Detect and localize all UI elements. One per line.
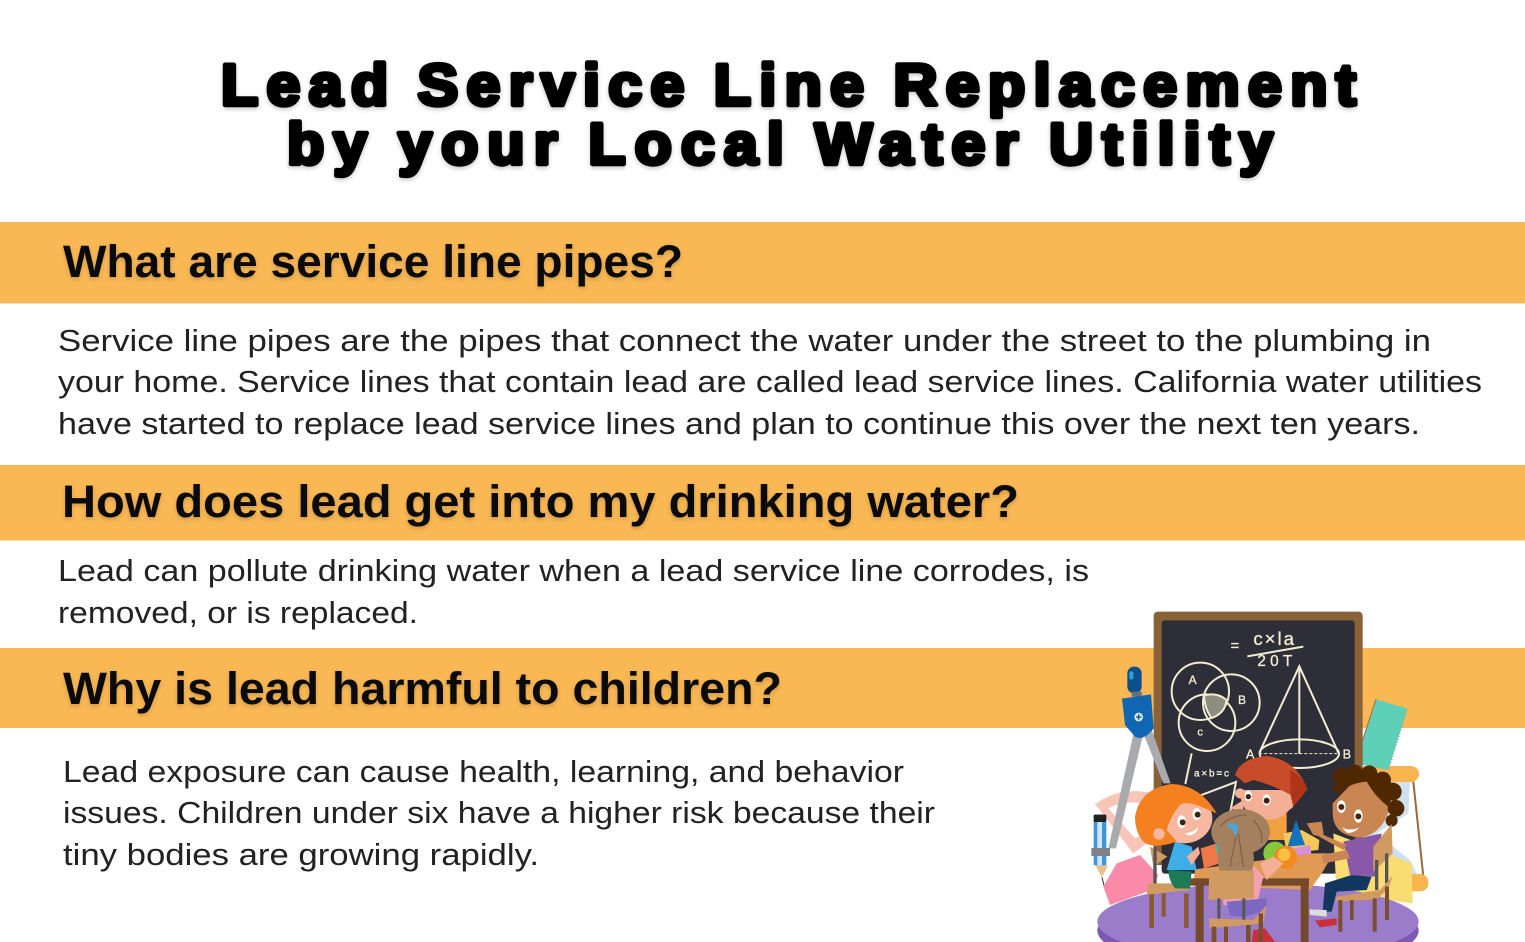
panel: what are service line pipes (0, 222, 1525, 441)
text block: how lead pollutes water (58, 553, 1089, 630)
icon: hourglass (1328, 766, 1428, 891)
text block: effects of lead exposure (63, 754, 935, 872)
text block: service line explanation: have started to replace lead service lines and plan to continue this over the next ten years. (58, 406, 1420, 441)
heading band: how does lead get into my drinking water: How does lead get into my drinking water? (62, 476, 1019, 527)
text block: effects of lead exposure: Lead exposure can cause health, learning, and behavior (63, 754, 904, 789)
text block: service line explanation (58, 323, 1482, 441)
chair: right (1336, 824, 1393, 932)
title: by your Local Water Utility (287, 111, 1273, 177)
heading band: why is lead harmful to children: Why is lead harmful to children? (63, 663, 782, 714)
icon: drawing compass (1091, 667, 1171, 885)
heading band: why is lead harmful to children (0, 648, 1525, 728)
title: Lead Service Line Replacement (221, 52, 1356, 118)
child: girl with ponytail, seen from behind (1211, 809, 1283, 942)
illustration: children at a desk in front of a chalkboard (1091, 612, 1428, 942)
heading band: what are service line pipes (0, 222, 1525, 304)
panel: why is lead harmful to children (0, 648, 1525, 872)
chair: front (1208, 871, 1267, 942)
icon: chalkboard: 20T (1257, 653, 1293, 670)
desk with toys (1187, 820, 1333, 942)
text block: effects of lead exposure: tiny bodies are growing rapidly. (63, 837, 539, 872)
icon: pink polyhedron (1103, 855, 1158, 905)
text block: service line explanation: your home. Service lines that contain lead are called lead service lines. California water utilities (58, 364, 1482, 399)
icon: chalkboard: c (1197, 726, 1203, 738)
icon: chalkboard: a×b=c (1194, 769, 1229, 780)
title (221, 52, 1356, 177)
platform (1097, 883, 1419, 942)
icon: protractor (1095, 791, 1160, 853)
icon: chalkboard: A (1246, 747, 1255, 761)
child: boy with curly hair (1307, 765, 1404, 927)
child: boy with red hair (1230, 756, 1307, 840)
heading band: what are service line pipes: What are service line pipes? (63, 236, 683, 287)
icon: ruler (1355, 699, 1407, 770)
panel: how does lead get into drinking water (0, 465, 1525, 630)
text block: how lead pollutes water: removed, or is replaced. (58, 595, 418, 630)
chair: left (1147, 847, 1190, 928)
icon: chalkboard: B (1343, 747, 1351, 761)
text block: service line explanation: Service line pipes are the pipes that connect the water under the street to the plumbing in (58, 323, 1431, 358)
text block: effects of lead exposure: issues. Children under six have a higher risk because their (63, 795, 935, 830)
icon: yellow block (1333, 833, 1413, 903)
child: girl with orange hair (1135, 784, 1217, 889)
text block: how lead pollutes water: Lead can pollute drinking water when a lead service line corrodes, is (58, 553, 1089, 588)
icon: chalkboard (1154, 612, 1363, 874)
icon: chalkboard: = (1231, 639, 1239, 655)
icon: chalkboard: B (1238, 693, 1246, 707)
icon: chalkboard: c×la (1253, 628, 1295, 649)
icon: chalkboard: A (1189, 673, 1197, 687)
heading band: how does lead get into my drinking water (0, 465, 1525, 540)
